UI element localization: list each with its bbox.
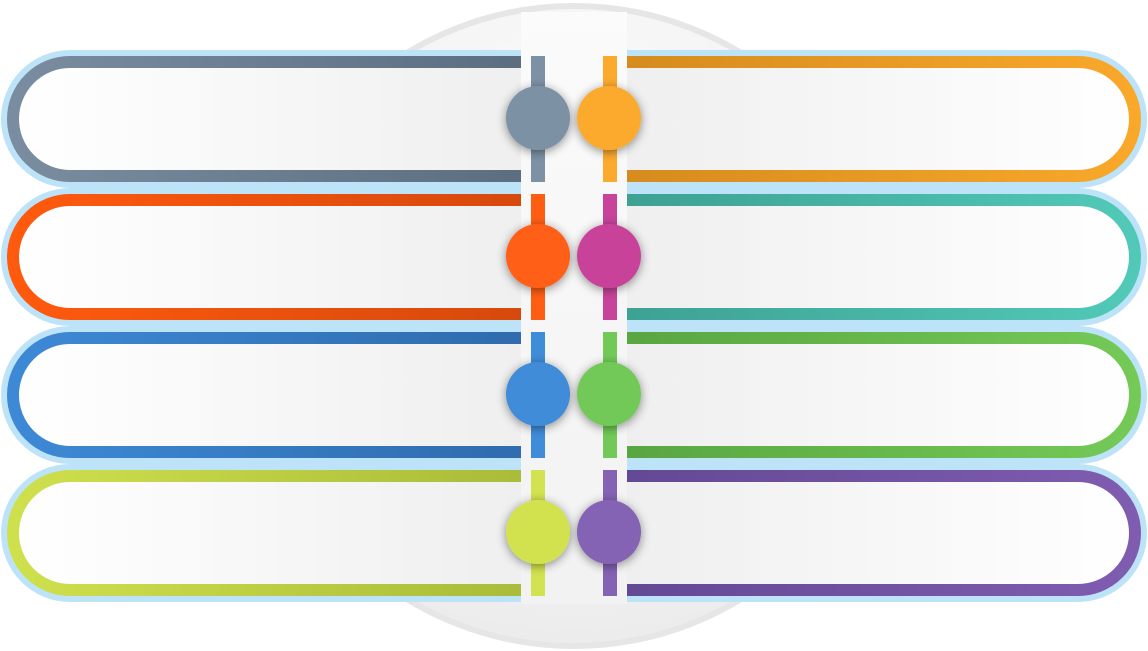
bar: left 2: [1, 188, 613, 326]
connector: right 3: [577, 332, 641, 458]
bar: right 4: [535, 464, 1147, 602]
connector: right 4: [577, 470, 641, 596]
connector: right 2: [577, 194, 641, 320]
connector: right 1: [577, 56, 641, 182]
bar: right 3: [535, 326, 1147, 464]
background circle: [254, 6, 894, 646]
bar: right 2: [535, 188, 1147, 326]
connector: left 4: [506, 470, 570, 596]
left bars: [1, 50, 613, 602]
bar: left 4: [1, 464, 613, 602]
central strip: [521, 12, 627, 604]
bar: left 1: [1, 50, 613, 188]
connectors: [506, 56, 641, 596]
connector: left 3: [506, 332, 570, 458]
connector: left 1: [506, 56, 570, 182]
bar: left 3: [1, 326, 613, 464]
bar: right 1: [535, 50, 1147, 188]
right bars: [535, 50, 1147, 602]
connector: left 2: [506, 194, 570, 320]
